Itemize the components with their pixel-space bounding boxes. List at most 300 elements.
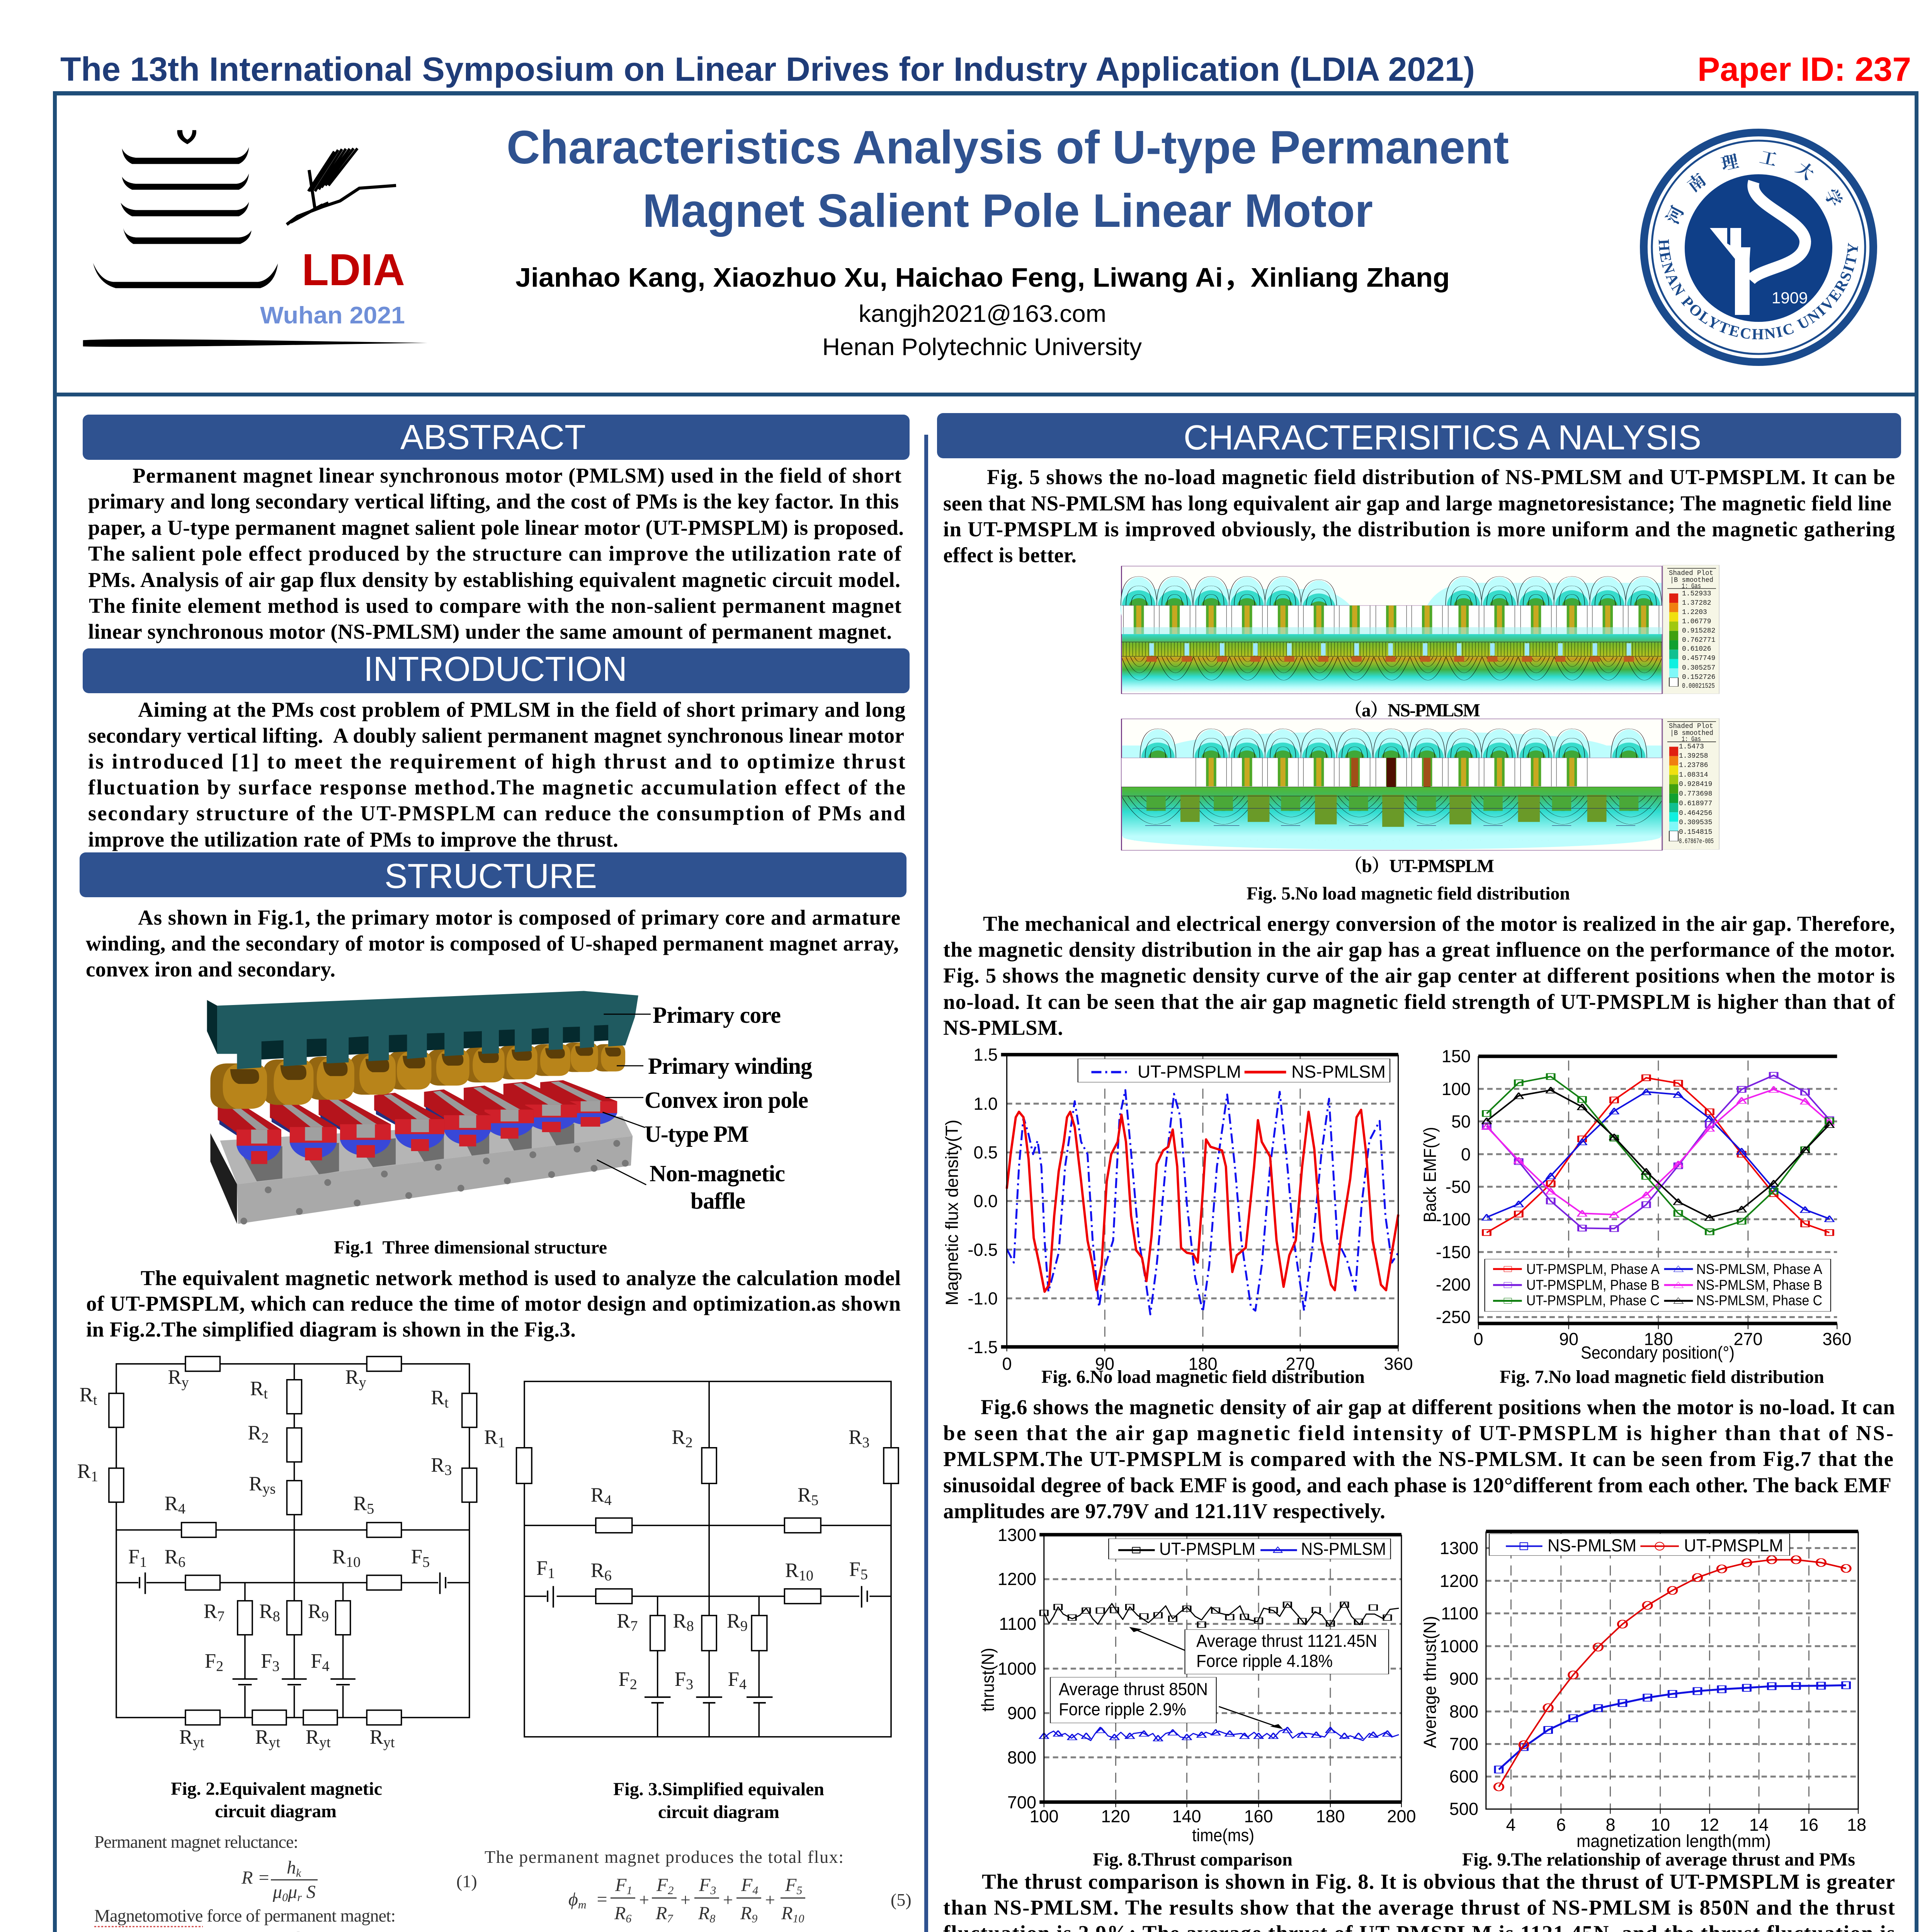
chart: fig 7 back EMF: 360	[1822, 1329, 1852, 1349]
figure 3: simplified equivalent circuit: 5	[811, 1492, 818, 1509]
panel: characteristics analysis heading and intro: in UT-PMSPLM is improved obviously, the distribution is more uniform and the magnetic gathering	[943, 517, 1895, 541]
text block: fig 6 and 7 discussion: be seen that the air gap magnetic field intensity of UT-PMSPLM is higher than that of NS-	[943, 1421, 1893, 1445]
figure 5: no load magnetic field distribution: 0.464256	[1679, 810, 1712, 817]
text block: equivalent magnetic network: The equivalent magnetic network method is used to analyze the calculation model	[141, 1266, 901, 1290]
chart: fig 8 thrust comparison: NS-PMLSM	[1301, 1539, 1386, 1559]
figure 2: equivalent magnetic circuit: circuit diagram	[215, 1801, 337, 1821]
figure 3: simplified equivalent circuit: 1	[498, 1434, 505, 1451]
figure 2: equivalent magnetic circuit: R	[165, 1546, 178, 1568]
chart: fig 9 average thrust versus magnetization length: 18	[1847, 1815, 1866, 1835]
chart: fig 6 magnetic flux density: -1.5	[968, 1337, 998, 1357]
equations 5 to 7: F	[615, 1875, 626, 1895]
chart: fig 6 magnetic flux density: 360	[1384, 1354, 1413, 1374]
equations 5 to 7: 9	[752, 1912, 757, 1925]
figure 2: equivalent magnetic circuit: R	[204, 1600, 217, 1622]
figure 2: equivalent magnetic circuit: yt	[319, 1734, 331, 1750]
panel: structure: winding, and the secondary of motor is composed of U-shaped permanent magnet array,	[86, 932, 899, 955]
chart: fig 8 thrust comparison: Force ripple 4.18%	[1196, 1651, 1333, 1671]
equations 5 to 7: F	[741, 1875, 752, 1895]
figure 2: equivalent magnetic circuit: F	[205, 1650, 216, 1672]
figure 2: equivalent magnetic circuit: R	[168, 1366, 182, 1388]
text block: air gap discussion	[943, 912, 1895, 1039]
figure 5: no load magnetic field distribution: （b）UT-PMSPLM	[1344, 856, 1494, 876]
panel: characteristics analysis heading and intro: effect is better.	[943, 543, 1077, 567]
icon: LDIA conference logo: Wuhan 2021	[260, 302, 405, 329]
figure 3: simplified equivalent circuit: R	[672, 1426, 685, 1449]
figure 2: equivalent magnetic circuit: R	[77, 1460, 91, 1483]
panel: introduction: secondary vertical lifting. A doubly salient permanent magnet synchronous linear motor	[88, 724, 904, 747]
figure 5: no load magnetic field distribution: 1.5473	[1679, 743, 1704, 751]
figure 1: three dimensional structure: Primary winding	[648, 1053, 812, 1079]
chart: fig 7 back EMF: -100	[1436, 1209, 1471, 1229]
figure 3: simplified equivalent circuit: 3	[862, 1434, 869, 1451]
figure 5: no load magnetic field distribution: （a）NS-PMLSM	[1344, 700, 1480, 721]
figure 2: equivalent magnetic circuit	[77, 1357, 477, 1821]
figure 2: equivalent magnetic circuit: F	[311, 1650, 322, 1672]
chart: fig 9 average thrust versus magnetization length: Average thrust(N)	[1420, 1616, 1440, 1748]
panel: characteristics analysis heading and intro: CHARACTERISITICS A NALYSIS	[1184, 418, 1701, 457]
figure 2: equivalent magnetic circuit: 2	[216, 1658, 223, 1675]
figure 5: no load magnetic field distribution: 1.39258	[1679, 752, 1708, 760]
equations 5 to 7: +	[680, 1890, 690, 1910]
equations 5 to 7: R	[740, 1903, 752, 1923]
text block: thrust discussion	[943, 1870, 1895, 1932]
figure 5: no load magnetic field distribution: Shaded Plot	[1669, 570, 1713, 577]
text block: air gap discussion: no-load. It can be seen that the air gap magnetic field strength of UT-PMSPLM is higher than that of	[943, 990, 1895, 1014]
authors and affiliation	[515, 262, 1450, 361]
figure 3: simplified equivalent circuit: F	[536, 1557, 548, 1579]
panel: introduction: fluctuation by surface response method.The magnetic accumulation effect of the	[88, 776, 905, 799]
authors and affiliation: Henan Polytechnic University	[822, 334, 1142, 361]
equations 5 to 7: 1	[626, 1884, 632, 1897]
equations 1 to 4: h	[287, 1857, 296, 1878]
figure 5: no load magnetic field distribution: Shaded Plot	[1669, 723, 1713, 730]
chart: fig 8 thrust comparison: 700	[1007, 1793, 1036, 1812]
text block: air gap discussion: NS-PMLSM.	[943, 1016, 1063, 1039]
chart: fig 7 back EMF: UT-PMSPLM, Phase C	[1526, 1293, 1660, 1308]
chart: fig 7 back EMF: NS-PMLSM, Phase A	[1696, 1261, 1822, 1277]
chart: fig 9 average thrust versus magnetization length	[1420, 1531, 1866, 1870]
equations 1 to 4: r	[297, 1891, 302, 1904]
figure 2: equivalent magnetic circuit: Fig. 2.Equivalent magnetic	[171, 1779, 382, 1799]
equations 5 to 7: 6	[626, 1912, 631, 1925]
chart: fig 8 thrust comparison	[978, 1525, 1416, 1870]
chart: fig 8 thrust comparison: Average thrust 1121.45N	[1196, 1631, 1377, 1651]
figure 5: no load magnetic field distribution: 8.67867e-005	[1679, 838, 1714, 845]
chart: fig 6 magnetic flux density: 180	[1188, 1354, 1218, 1374]
equations 1 to 4: (1)	[456, 1871, 477, 1891]
equations 1 to 4: S	[302, 1882, 316, 1902]
title: Magnet Salient Pole Linear Motor	[643, 184, 1373, 237]
panel: abstract: Permanent magnet linear synchronous motor (PMLSM) used in the field of short	[133, 464, 902, 487]
panel: abstract	[83, 415, 910, 643]
text block: thrust discussion: than NS-PMLSM. The results show that the average thrust of NS-PMLSM is 850N and the thrust	[943, 1896, 1895, 1919]
figure 5: no load magnetic field distribution: 1.23786	[1679, 762, 1708, 769]
figure 3: simplified equivalent circuit: F	[675, 1668, 686, 1690]
figure 5: no load magnetic field distribution: 0.618977	[1679, 800, 1712, 808]
chart: fig 6 magnetic flux density: UT-PMSPLM	[1138, 1062, 1241, 1082]
chart: fig 7 back EMF: Back EMF(V)	[1420, 1127, 1440, 1223]
panel: abstract: The finite element method is used to compare with the non-salient permanent magnet	[89, 594, 902, 617]
figure 3: simplified equivalent circuit: R	[785, 1559, 799, 1582]
equations 5 to 7: R	[656, 1903, 667, 1923]
figure 5: no load magnetic field distribution: 0.305257	[1682, 664, 1715, 672]
panel: abstract: primary and long secondary vertical lifting, and the cost of PMs is the key factor. In this	[88, 490, 899, 513]
panel: structure	[80, 852, 906, 981]
panel: abstract: paper, a U-type permanent magnet salient pole linear motor (UT-PMSPLM) is proposed.	[88, 516, 904, 539]
panel: abstract: PMs. Analysis of air gap flux density by establishing equivalent magnetic circuit model.	[88, 568, 900, 592]
figure 3: simplified equivalent circuit: circuit diagram	[658, 1802, 779, 1822]
figure 2: equivalent magnetic circuit: R	[255, 1726, 269, 1748]
equations 5 to 7: R	[698, 1903, 709, 1923]
chart: fig 7 back EMF: -250	[1436, 1307, 1471, 1327]
figure 1: three dimensional structure: U-type PM	[645, 1121, 749, 1147]
figure 5: no load magnetic field distribution: 0.309535	[1679, 819, 1712, 827]
equations 5 to 7: 5	[796, 1884, 802, 1897]
figure 2: equivalent magnetic circuit: t	[264, 1386, 268, 1402]
chart: fig 8 thrust comparison: Average thrust 850N	[1059, 1679, 1208, 1699]
equations 1 to 4: 0	[282, 1891, 288, 1904]
chart: fig 9 average thrust versus magnetization length: 1000	[1440, 1636, 1478, 1656]
panel: abstract: The salient pole effect produced by the structure can improve the utilization rate of	[88, 542, 902, 565]
title	[507, 121, 1509, 237]
panel: introduction: is introduced [1] to meet the requirement of high thrust and to optimize thrust	[88, 750, 906, 773]
chart: fig 9 average thrust versus magnetization length: 600	[1449, 1767, 1478, 1786]
figure 1: three dimensional structure: Primary core	[653, 1002, 781, 1028]
text block: air gap discussion: Fig. 5 shows the magnetic density curve of the air gap center at different positions when the motor is	[943, 964, 1895, 987]
equations 5 to 7: =	[587, 1889, 608, 1910]
chart: fig 8 thrust comparison: thrust(N)	[978, 1648, 998, 1712]
chart: fig 6 magnetic flux density: -0.5	[968, 1240, 998, 1260]
chart: fig 7 back EMF: -50	[1446, 1177, 1471, 1197]
equations 5 to 7: 3	[710, 1884, 716, 1897]
chart: fig 7 back EMF: -200	[1436, 1275, 1471, 1294]
equations 5 to 7: F	[785, 1875, 796, 1895]
figure 2: equivalent magnetic circuit: F	[411, 1546, 422, 1568]
figure 5: no load magnetic field distribution: 1.2203	[1682, 609, 1707, 616]
chart: fig 8 thrust comparison: 1100	[999, 1614, 1036, 1634]
figure 2: equivalent magnetic circuit: 7	[217, 1609, 224, 1625]
text block: equivalent magnetic network	[86, 1266, 901, 1341]
conference heading: The 13th International Symposium on Linear Drives for Industry Application (LDIA 2021)	[60, 51, 1475, 88]
text block: fig 6 and 7 discussion: amplitudes are 97.79V and 121.11V respectively.	[943, 1499, 1385, 1523]
chart: fig 6 magnetic flux density: -1.0	[968, 1289, 998, 1308]
chart: fig 9 average thrust versus magnetization length: UT-PMSPLM	[1684, 1536, 1783, 1555]
figure 5: no load magnetic field distribution: 0.61026	[1682, 645, 1711, 653]
chart: fig 6 magnetic flux density: 0.5	[973, 1143, 998, 1162]
chart: fig 7 back EMF: NS-PMLSM, Phase B	[1696, 1277, 1822, 1293]
chart: fig 7 back EMF: -150	[1436, 1242, 1471, 1262]
figure 3: simplified equivalent circuit: F	[728, 1668, 739, 1690]
figure 3: simplified equivalent circuit: 10	[799, 1568, 813, 1584]
chart: fig 9 average thrust versus magnetization length: NS-PMLSM	[1548, 1536, 1636, 1555]
panel: structure: STRUCTURE	[384, 857, 597, 896]
figure 3: simplified equivalent circuit: 9	[740, 1618, 748, 1634]
figure 2: equivalent magnetic circuit: 1	[139, 1554, 147, 1570]
figure 2: equivalent magnetic circuit: R	[179, 1726, 193, 1748]
chart: fig 7 back EMF: 0	[1473, 1329, 1483, 1349]
figure 3: simplified equivalent circuit: 8	[687, 1618, 694, 1634]
figure 5: no load magnetic field distribution: Fig. 5.No load magnetic field distribution	[1247, 883, 1570, 904]
equations 5 to 7: 4	[752, 1884, 758, 1897]
figure 3: simplified equivalent circuit: 3	[686, 1677, 693, 1693]
figure 1: three dimensional structure: Fig.1 Three dimensional structure	[334, 1237, 607, 1258]
figure 5: no load magnetic field distribution: 0.762771	[1682, 636, 1715, 644]
figure 3: simplified equivalent circuit: R	[727, 1610, 740, 1632]
equations 1 to 4: k	[296, 1867, 301, 1879]
chart: fig 7 back EMF: UT-PMSPLM, Phase B	[1526, 1277, 1660, 1293]
chart: fig 9 average thrust versus magnetization length: 1200	[1440, 1571, 1478, 1591]
figure 3: simplified equivalent circuit: R	[798, 1484, 811, 1506]
figure 3: simplified equivalent circuit: F	[849, 1558, 861, 1580]
figure 5: no load magnetic field distribution: 0.154815	[1679, 828, 1712, 836]
figure 2: equivalent magnetic circuit: R	[165, 1492, 178, 1515]
figure 2: equivalent magnetic circuit: R	[259, 1600, 273, 1622]
equations 5 to 7: +	[765, 1890, 775, 1910]
text block: air gap discussion: The mechanical and electrical energy conversion of the motor is realized in the air gap. Therefore,	[983, 912, 1895, 935]
equations 5 to 7: +	[723, 1890, 733, 1910]
panel: introduction: secondary structure of the UT-PMSPLM can reduce the consumption of PMs and	[88, 801, 905, 825]
figure 2: equivalent magnetic circuit: t	[444, 1395, 449, 1411]
chart: fig 9 average thrust versus magnetization length: 14	[1749, 1815, 1769, 1835]
authors and affiliation: Jianhao Kang, Xiaozhuo Xu, Haichao Feng, Liwang Ai，Xinliang Zhang	[515, 262, 1450, 293]
panel: abstract: linear synchronous motor (NS-PMLSM) under the same amount of permanent magnet.	[88, 620, 892, 643]
chart: fig 6 magnetic flux density: 1.0	[973, 1094, 998, 1114]
figure 2: equivalent magnetic circuit: 1	[91, 1468, 98, 1485]
figure 2: equivalent magnetic circuit: R	[308, 1600, 321, 1622]
equations 5 to 7: 7	[667, 1912, 673, 1925]
icon: LDIA conference logo: LDIA	[302, 245, 405, 295]
chart: fig 6 magnetic flux density: 0	[1002, 1354, 1012, 1374]
chart: fig 9 average thrust versus magnetization length: 6	[1556, 1815, 1566, 1835]
figure 2: equivalent magnetic circuit: R	[370, 1726, 383, 1748]
text block: fig 6 and 7 discussion: sinusoidal degree of back EMF is good, and each phase is 120°different from each other. The back EMF	[943, 1473, 1891, 1497]
text block: equivalent magnetic network: in Fig.2.The simplified diagram is shown in the Fig.3.	[86, 1318, 576, 1341]
figure 2: equivalent magnetic circuit: R	[431, 1454, 444, 1476]
figure 2: equivalent magnetic circuit: y	[359, 1374, 366, 1391]
chart: fig 7 back EMF: 90	[1559, 1329, 1578, 1349]
figure 2: equivalent magnetic circuit: R	[431, 1386, 444, 1409]
figure 3: simplified equivalent circuit: R	[591, 1559, 604, 1582]
figure 2: equivalent magnetic circuit: 6	[178, 1554, 185, 1570]
equations 5 to 7: +	[639, 1890, 649, 1910]
figure 2: equivalent magnetic circuit: 4	[178, 1501, 185, 1517]
equations 1 to 4	[60, 1832, 477, 1932]
figure 3: simplified equivalent circuit: F	[619, 1668, 630, 1690]
equations 1 to 4: R =	[241, 1867, 270, 1888]
figure 5: no load magnetic field distribution: 0.928419	[1679, 781, 1712, 788]
chart: fig 7 back EMF	[1420, 1046, 1852, 1387]
chart: fig 7 back EMF: 150	[1442, 1046, 1471, 1066]
chart: fig 8 thrust comparison: 100	[1029, 1806, 1059, 1826]
figure 5: no load magnetic field distribution: 0.915282	[1682, 627, 1715, 635]
figure 2: equivalent magnetic circuit: R	[306, 1726, 319, 1748]
equations 5 to 7: The permanent magnet produces the total flux:	[485, 1847, 844, 1867]
figure 2: equivalent magnetic circuit: t	[93, 1392, 97, 1408]
panel: introduction: improve the utilization rate of PMs to improve the thrust.	[88, 828, 618, 851]
chart: fig 9 average thrust versus magnetization length: 700	[1449, 1734, 1478, 1754]
figure 2: equivalent magnetic circuit: R	[345, 1366, 359, 1388]
icon: university seal: HENAN POLYTECHNIC UNIVERSITY	[1655, 239, 1862, 343]
panel: introduction: INTRODUCTION	[364, 650, 627, 689]
figure 2: equivalent magnetic circuit: R	[248, 1422, 261, 1444]
figure 3: simplified equivalent circuit: R	[617, 1610, 630, 1632]
chart: fig 8 thrust comparison: 160	[1244, 1806, 1273, 1826]
figure 5: no load magnetic field distribution: 0.457749	[1682, 655, 1715, 662]
chart: fig 7 back EMF: 100	[1442, 1079, 1471, 1099]
icon: university seal: 河南理工大学	[1659, 143, 1858, 228]
figure 2: equivalent magnetic circuit: yt	[193, 1734, 204, 1750]
figure 2: equivalent magnetic circuit: F	[128, 1546, 139, 1568]
figure 5: no load magnetic field distribution: 1: Gas	[1682, 583, 1701, 590]
figure 2: equivalent magnetic circuit: ys	[262, 1481, 276, 1497]
figure 3: simplified equivalent circuit: 4	[604, 1492, 612, 1509]
figure 3: simplified equivalent circuit: 2	[685, 1434, 693, 1451]
chart: fig 7 back EMF: 270	[1733, 1329, 1763, 1349]
figure 3: simplified equivalent circuit: 4	[739, 1677, 747, 1693]
figure 5: no load magnetic field distribution	[1120, 565, 1719, 904]
figure 2: equivalent magnetic circuit: F	[261, 1650, 272, 1672]
chart: fig 6 magnetic flux density: 0.0	[973, 1191, 998, 1211]
chart: fig 8 thrust comparison: 1300	[998, 1525, 1036, 1545]
figure 2: equivalent magnetic circuit: R	[353, 1492, 367, 1515]
equations 5 to 7: F	[656, 1875, 668, 1895]
figure 5: no load magnetic field distribution: |B smoothed	[1670, 577, 1713, 584]
chart: fig 6 magnetic flux density: 1.5	[973, 1045, 998, 1065]
figure 2: equivalent magnetic circuit: R	[249, 1473, 262, 1495]
figure 2: equivalent magnetic circuit: R	[80, 1384, 93, 1406]
chart: fig 9 average thrust versus magnetization length: 16	[1799, 1815, 1818, 1835]
chart: fig 9 average thrust versus magnetization length: 12	[1700, 1815, 1719, 1835]
figure 3: simplified equivalent circuit: 2	[630, 1677, 637, 1693]
chart: fig 6 magnetic flux density: Fig. 6.No load magnetic field distribution	[1041, 1367, 1365, 1387]
chart: fig 8 thrust comparison: 1000	[998, 1659, 1036, 1679]
figure 3: simplified equivalent circuit	[484, 1381, 898, 1822]
equations 5 to 7: (5)	[891, 1890, 912, 1910]
icon: university seal	[1644, 133, 1873, 362]
chart: fig 7 back EMF: UT-PMSPLM, Phase A	[1526, 1261, 1660, 1277]
chart: fig 6 magnetic flux density: 90	[1095, 1354, 1114, 1374]
equations 1 to 4: μ	[273, 1882, 282, 1902]
panel: abstract: ABSTRACT	[400, 418, 586, 457]
figure 5: no load magnetic field distribution: 1.37282	[1682, 599, 1711, 607]
figure 5: no load magnetic field distribution: 0.152726	[1682, 673, 1715, 681]
figure 5: no load magnetic field distribution: 1.52933	[1682, 590, 1711, 598]
figure 2: equivalent magnetic circuit: y	[182, 1374, 189, 1391]
equations 5 to 7: 2	[668, 1884, 673, 1897]
chart: fig 7 back EMF: 0	[1461, 1145, 1471, 1164]
figure 5: no load magnetic field distribution: 1.08314	[1679, 771, 1708, 779]
panel: characteristics analysis heading and intro: Fig. 5 shows the no-load magnetic field distribution of NS-PMLSM and UT-PMSPLM. It can be	[987, 465, 1895, 489]
figure 2: equivalent magnetic circuit: 3	[444, 1462, 452, 1478]
chart: fig 6 magnetic flux density	[942, 1045, 1413, 1387]
chart: fig 9 average thrust versus magnetization length: magnetization length(mm)	[1577, 1831, 1771, 1851]
authors and affiliation: kangjh2021@163.com	[859, 301, 1106, 327]
chart: fig 9 average thrust versus magnetization length: 8	[1605, 1815, 1616, 1835]
text block: air gap discussion: the magnetic density distribution in the air gap has a great influence on the performance of the motor.	[943, 938, 1895, 961]
panel: characteristics analysis heading and intro: seen that NS-PMLSM has long equivalent air gap and large magnetoresistance; The magnetic field line	[943, 492, 1891, 515]
panel: structure: convex iron and secondary.	[86, 957, 335, 981]
equations 5 to 7: F	[699, 1875, 710, 1895]
chart: fig 7 back EMF: NS-PMLSM, Phase C	[1696, 1293, 1822, 1308]
equations 5 to 7: R	[614, 1903, 626, 1923]
text block: fig 6 and 7 discussion	[943, 1395, 1895, 1523]
figure 3: simplified equivalent circuit: R	[673, 1610, 687, 1632]
text block: equivalent magnetic network: of UT-PMSPLM, which can reduce the time of motor design and optimization.as shown	[86, 1292, 901, 1315]
equations 5 to 7: R	[781, 1903, 793, 1923]
panel: introduction: Aiming at the PMs cost problem of PMLSM in the field of short primary and long	[138, 698, 905, 721]
figure 3: simplified equivalent circuit: R	[484, 1426, 498, 1449]
icon: LDIA conference logo	[83, 130, 427, 347]
equations 5 to 7: m	[578, 1898, 587, 1911]
chart: fig 8 thrust comparison: time(ms)	[1192, 1825, 1254, 1845]
figure 2: equivalent magnetic circuit: 3	[272, 1658, 279, 1675]
chart: fig 8 thrust comparison: UT-PMSPLM	[1159, 1539, 1255, 1559]
chart: fig 9 average thrust versus magnetization length: 900	[1449, 1669, 1478, 1689]
equations 1 to 4: Magnetomotive force of permanent magnet:	[94, 1906, 396, 1925]
chart: fig 6 magnetic flux density: NS-PMLSM	[1291, 1062, 1386, 1082]
chart: fig 8 thrust comparison: 120	[1101, 1806, 1130, 1826]
equations 1 to 4: Permanent magnet reluctance:	[94, 1832, 298, 1852]
figure 2: equivalent magnetic circuit: R	[250, 1377, 264, 1400]
figure 2: equivalent magnetic circuit: 5	[422, 1554, 430, 1570]
figure 2: equivalent magnetic circuit: 2	[261, 1430, 269, 1446]
chart: fig 7 back EMF: Fig. 7.No load magnetic field distribution	[1500, 1367, 1824, 1387]
figure 3: simplified equivalent circuit: R	[591, 1484, 604, 1506]
figure 1: three dimensional structure: Convex iron pole	[645, 1087, 808, 1113]
figure 2: equivalent magnetic circuit: 9	[321, 1609, 329, 1625]
chart: fig 9 average thrust versus magnetization length: 800	[1449, 1702, 1478, 1721]
figure 3: simplified equivalent circuit: Fig. 3.Simplified equivalen	[613, 1779, 824, 1799]
equations 5 to 7: 10	[793, 1912, 804, 1925]
figure 2: equivalent magnetic circuit: R	[332, 1546, 346, 1568]
equations 5 to 7: ϕ	[568, 1889, 578, 1910]
figure 2: equivalent magnetic circuit: 8	[273, 1609, 280, 1625]
figure 2: equivalent magnetic circuit: 4	[322, 1658, 330, 1675]
chart: fig 9 average thrust versus magnetization length: 1300	[1440, 1538, 1478, 1558]
text block: fig 6 and 7 discussion: PMLSPM.The UT-PMSPLM is compared with the NS-PMLSM. It can be seen from Fig.7 that the	[943, 1447, 1893, 1471]
chart: fig 6 magnetic flux density: Magnetic flux density(T)	[942, 1120, 962, 1305]
figure 3: simplified equivalent circuit: 5	[861, 1566, 868, 1583]
text block: fig 6 and 7 discussion: Fig.6 shows the magnetic density of air gap at different positions when the motor is no-load. It can	[981, 1395, 1895, 1419]
chart: fig 6 magnetic flux density: 270	[1286, 1354, 1315, 1374]
equations 1 to 4: μ	[287, 1882, 297, 1902]
paper id: Paper ID: 237	[1697, 51, 1911, 88]
figure 5: no load magnetic field distribution: 0.00021525	[1682, 682, 1715, 690]
chart: fig 7 back EMF: Secondary position(°)	[1581, 1343, 1735, 1362]
chart: fig 7 back EMF: 180	[1644, 1329, 1673, 1349]
chart: fig 9 average thrust versus magnetization length: 4	[1506, 1815, 1516, 1835]
chart: fig 9 average thrust versus magnetization length: 1100	[1441, 1604, 1478, 1623]
figure 1: three dimensional structure: baffle	[690, 1188, 745, 1214]
chart: fig 8 thrust comparison: 800	[1007, 1748, 1036, 1767]
icon: university seal: 1909	[1772, 289, 1808, 307]
figure 3: simplified equivalent circuit: 7	[630, 1618, 638, 1634]
figure 2: equivalent magnetic circuit: 5	[367, 1501, 374, 1517]
figure 3: simplified equivalent circuit: R	[849, 1426, 862, 1449]
equations 5 to 7: 8	[709, 1912, 715, 1925]
chart: fig 8 thrust comparison: 900	[1007, 1703, 1036, 1723]
figure 2: equivalent magnetic circuit: yt	[383, 1734, 395, 1750]
chart: fig 9 average thrust versus magnetization length: 500	[1449, 1799, 1478, 1819]
figure 3: simplified equivalent circuit: 6	[604, 1568, 612, 1584]
chart: fig 8 thrust comparison: 180	[1316, 1806, 1345, 1826]
figure 5: no load magnetic field distribution: |B smoothed	[1670, 730, 1713, 737]
figure 5: no load magnetic field distribution: 1: Gas	[1682, 736, 1701, 743]
figure 5: no load magnetic field distribution: 0.773698	[1679, 790, 1712, 798]
chart: fig 9 average thrust versus magnetization length: Fig. 9.The relationship of average thrust and PMs	[1462, 1849, 1855, 1870]
panel: structure: As shown in Fig.1, the primary motor is composed of primary core and armature	[138, 906, 900, 929]
